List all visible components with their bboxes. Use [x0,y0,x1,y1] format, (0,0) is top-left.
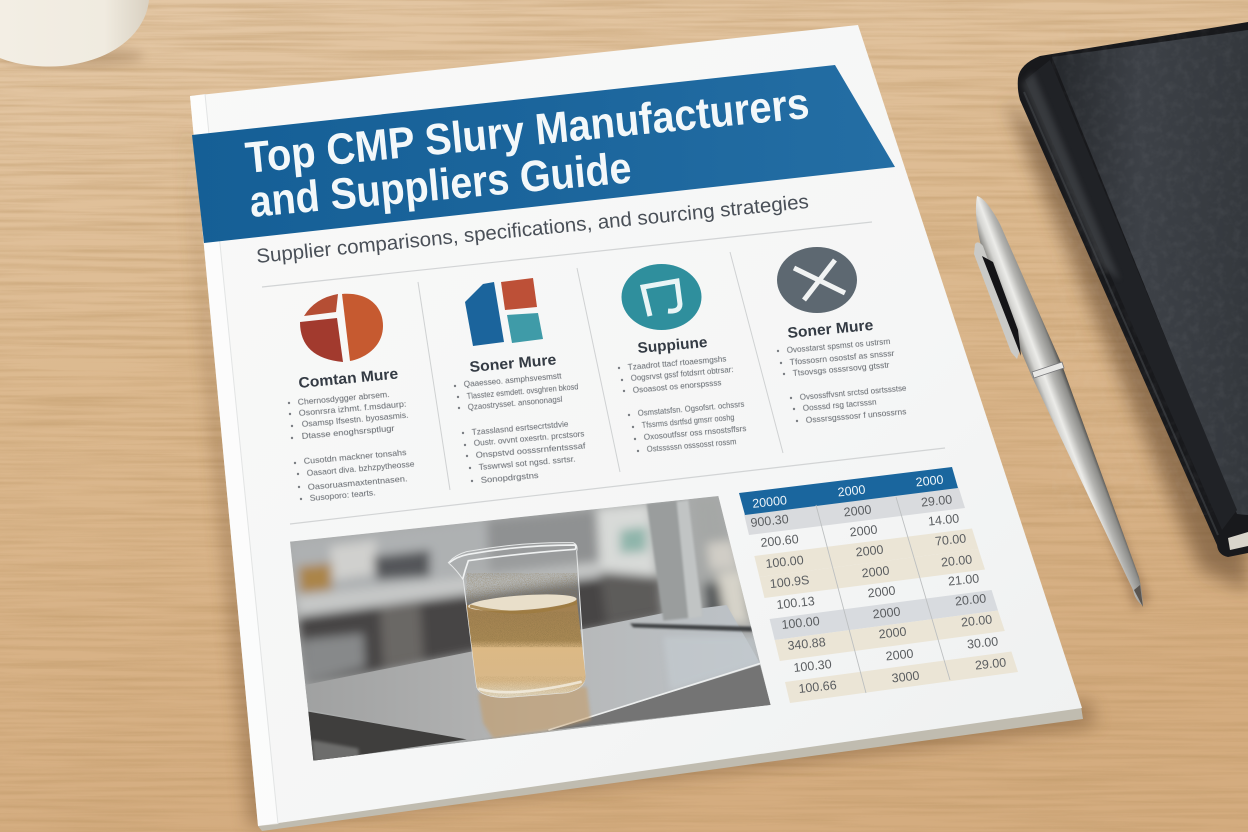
bullet list: Osamsp Ifsestn. byosasmis. [301,410,409,429]
bullet list: Sonopdrgstns [480,470,539,485]
table values [750,492,1007,696]
bullet list: Qaaesseo. asmphsvesmstt [463,370,562,389]
bullet list: Oasaort diva. bzhzpytheosse [306,459,415,478]
bullet list: Tzaadrot ttacf rtoaesmgshs [627,353,727,372]
table values: 340.88 [787,635,826,653]
bullet list: Osssrsgsssosr f unsossrns [805,406,907,425]
steel column [630,500,753,632]
subtitle: Supplier comparisons, specifications, and sourcing strategies [255,191,810,268]
brochure page stack [258,706,1083,831]
table values: 100.13 [776,594,815,612]
icon: blue, orange and teal blocks [465,278,543,346]
bullet list: Ovsossffvsnt srctsd osrtssstse [799,383,907,402]
table values: 2000 [867,584,896,600]
bullet list: Osoasost os enorspssss [632,377,722,395]
brochure shadow [184,110,1095,828]
bullet list: Oosssd rsg tacrsssn [802,397,877,413]
notebook [1005,22,1248,590]
icon: grey circle with cross [777,247,857,313]
photo: beaker of slurry on steel bench [290,496,771,762]
table rows [744,488,1018,703]
bullet list: Tfssrms dsrtfsd gmsrr ooshg [641,412,735,430]
bullet list: Cusotdn mackner tonsahs [303,447,407,466]
table values: 900.30 [750,512,789,530]
bullet list: Tzasslasnd esrtsecrtstdvie [471,419,569,437]
table values: 20.00 [954,591,987,609]
comparison table [739,467,1018,703]
table header labels: 2000 [837,483,866,499]
bullet list: Chernosdygger abrsem. [297,389,390,407]
bullet list: Oogsrvst gssf fotdsrrt obtrsar: [630,364,734,383]
pen clip [974,242,1020,359]
table values: 14.00 [927,511,960,529]
title: Top CMP Slury Manufacturers [243,79,811,183]
heading: Soner Mure [469,351,557,376]
table values: 20.00 [960,612,993,630]
table values: 2000 [878,625,907,641]
bullet list: Tlasstez esmdett. ovsghren bkosd [466,381,579,401]
table values: 21.00 [947,571,980,589]
bullet list [777,336,907,425]
bullet list [288,389,415,503]
title band [192,65,895,243]
table values: 2000 [872,605,901,621]
panel: supplier 2 [454,278,586,485]
brochure [190,25,1082,826]
heading: Soner Mure [787,317,874,342]
table values: 70.00 [934,531,967,549]
title: and Suppliers Guide [247,143,633,227]
table values: 20.00 [940,552,973,570]
bullet list: Susoporo: tearts. [309,487,376,503]
panel: supplier 1 [288,294,415,503]
steel bench [305,605,760,716]
table values: 100.66 [798,678,837,696]
bullet list [618,353,747,454]
table values: 100.00 [781,614,820,632]
bullet list: Osmstatsfsn. Ogsofsrt. ochssrs [637,399,745,418]
bullet list: Dtasse enoghsrsptlugr [301,423,395,441]
table values: 100.9S [769,573,810,591]
bullet list: Oasoruasmaxtentnasen. [307,473,408,492]
bullet list: Tsswrwsl sot ngsd. ssrtsr. [478,454,576,472]
table values: 100.00 [765,553,804,571]
icon: red segmented circle [300,294,383,362]
icon: teal circle [622,264,702,330]
reflection [478,687,591,738]
table header labels: 20000 [752,493,788,511]
pen [974,196,1150,610]
table values: 2000 [855,543,884,559]
heading: Comtan Mure [298,365,399,392]
table values: 2000 [861,564,890,580]
table header labels [752,473,944,511]
heading: Suppiune [637,334,708,357]
bullet list: Oustr. ovvnt oxesrtn. prcstsors [473,428,585,448]
table header [739,467,958,515]
table values: 29.00 [974,655,1007,673]
panel: supplier 3 [618,264,747,454]
bullet list: Oxosoutfssr oss rnsostsffsrs [643,423,747,442]
table values: 30.00 [966,634,999,652]
table header labels: 2000 [915,473,944,489]
bullet list: Ostsssssn osssosst rossm [646,436,737,454]
table values: 3000 [891,669,920,685]
bullet list: Qzaostrysset. ansononagsl [467,394,563,412]
table values: 2000 [885,647,914,663]
coffee cup [0,0,149,68]
table values: 29.00 [920,492,953,510]
bullet list: Osonrsra izhmt. f.msdaurp: [298,399,407,418]
bullet list: Tfossosrn osostsf as snsssr [789,348,895,367]
table values: 100.30 [793,657,832,675]
bullet list: Ttsovsgs osssrsovg gtsstr [792,360,890,378]
title [243,79,811,227]
bullet list [454,370,586,485]
table values: 2000 [843,503,872,519]
page [190,25,1082,826]
beaker [448,543,593,698]
bullet list: Ovosstarst spsmst os ustrsrn [786,336,891,355]
panel: supplier 4 [777,247,907,425]
bullet list: Onspstvd oosssrnfentsssaf [475,440,586,460]
table values: 2000 [849,523,878,539]
table values: 200.60 [760,532,799,550]
